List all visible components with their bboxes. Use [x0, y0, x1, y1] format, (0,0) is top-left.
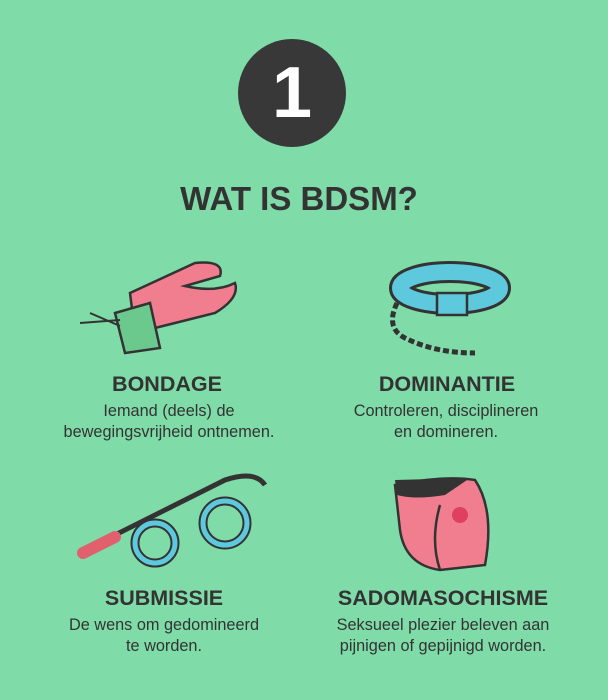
- text: dominantie: en domineren.: [394, 423, 498, 441]
- text: submissie: te worden.: [126, 637, 202, 655]
- text: submissie: De wens om gedomineerd: [69, 616, 259, 634]
- heading: bondage: BONDAGE: [112, 372, 222, 396]
- number badge: 1: [272, 53, 312, 133]
- text: sadomasochisme: pijnigen of gepijnigd worden.: [340, 637, 546, 655]
- heading: dominantie: DOMINANTIE: [379, 372, 515, 396]
- text: sadomasochisme: Seksueel plezier beleven aan: [337, 616, 549, 634]
- number badge: [238, 39, 346, 147]
- heading: submissie: SUBMISSIE: [105, 586, 223, 610]
- text: dominantie: [354, 402, 538, 441]
- text: bondage: bewegingsvrijheid ontnemen.: [64, 423, 274, 441]
- text: bondage: Iemand (deels) de: [103, 402, 235, 420]
- text: sadomasochisme: [337, 616, 549, 655]
- icon: collar: [389, 261, 511, 356]
- text: dominantie: Controleren, disciplineren: [354, 402, 538, 420]
- icon: bound hand: [80, 261, 238, 354]
- text: submissie: [69, 616, 259, 655]
- text: bondage: [64, 402, 274, 441]
- icon: buttocks: [394, 477, 490, 572]
- title: WAT IS BDSM?: [180, 180, 418, 217]
- icon: whip and handcuffs: [77, 474, 267, 568]
- heading: sadomasochisme: SADOMASOCHISME: [338, 586, 548, 610]
